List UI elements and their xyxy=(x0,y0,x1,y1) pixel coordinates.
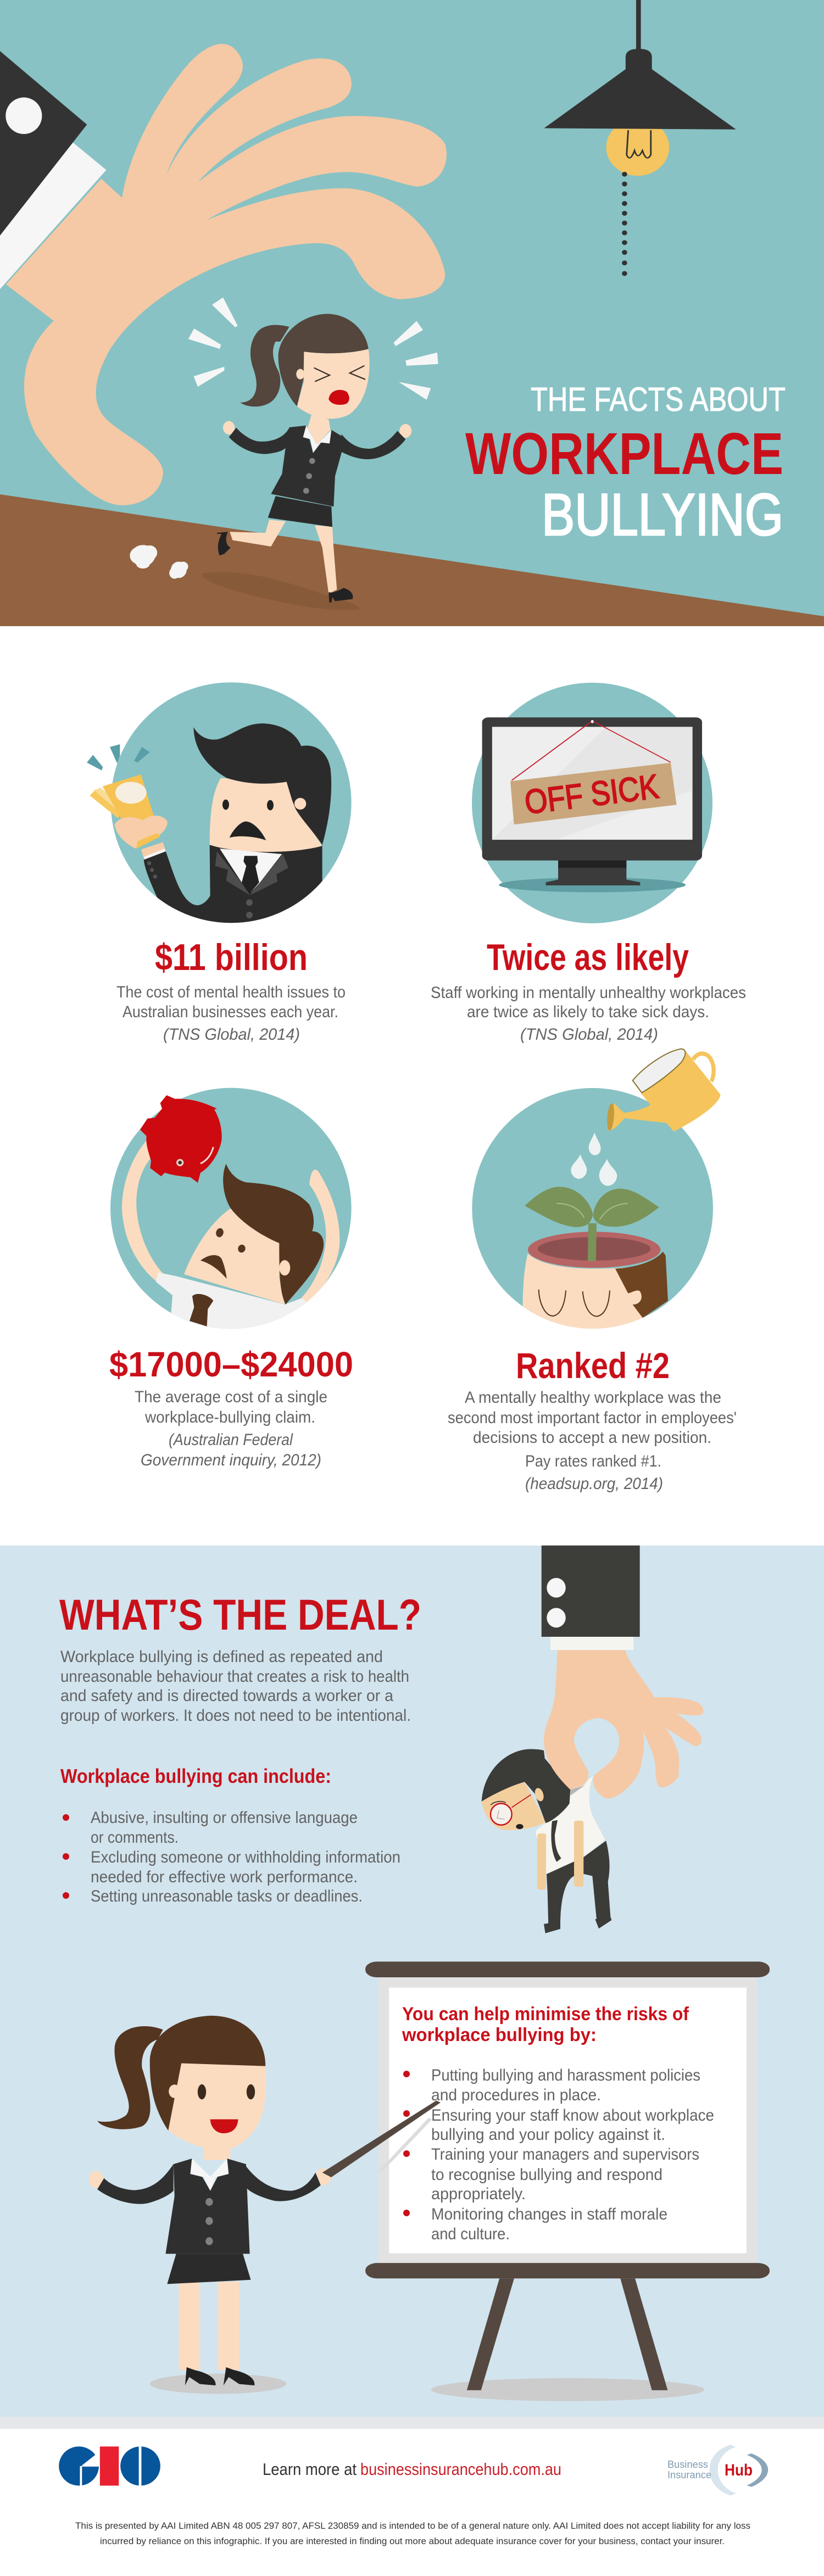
heading: minimise the risks: You can help minimise the risks of xyxy=(402,2004,689,2025)
icon: plant growing from head xyxy=(472,1049,721,1346)
heading: what's the deal: WHAT’S THE DEAL? xyxy=(59,1590,421,1639)
panel: $11 billion xyxy=(87,682,352,1044)
text block: ranked #2 description: (headsup.org, 2014) xyxy=(525,1475,663,1493)
text block: definition: Workplace bullying is defined as repeated and xyxy=(60,1648,383,1666)
text block: twice as likely description: Staff working in mentally unhealthy workplaces xyxy=(431,984,746,1002)
text block: ranked #2 description: A mentally healthy workplace was the xyxy=(465,1389,721,1407)
logo: business insurance hub: Hub xyxy=(725,2461,753,2479)
text block: twice as likely description: are twice as likely to take sick days. xyxy=(467,1003,709,1021)
text block: claim cost description: (Australian Federal xyxy=(169,1431,293,1449)
icon: dust puffs xyxy=(130,545,188,579)
list: minimise risks actions: and culture. xyxy=(431,2225,510,2243)
list: minimise risks actions: to recognise bullying and respond xyxy=(431,2166,662,2184)
icon: alarm marks xyxy=(188,297,438,400)
list: bullying behaviours: Excluding someone or withholding information xyxy=(91,1848,400,1866)
icon: man with money xyxy=(87,682,352,932)
text block: $11 billion description xyxy=(116,983,346,1044)
text block: ranked #2 description: Pay rates ranked #1. xyxy=(525,1452,661,1470)
logo: GIO xyxy=(59,2446,160,2486)
subheading: can include: Workplace bullying can include: xyxy=(60,1765,331,1787)
list: minimise risks actions: Monitoring changes in staff morale xyxy=(431,2205,667,2223)
illustration: easel board xyxy=(322,1961,770,2401)
text block: definition xyxy=(60,1648,411,1725)
heading: minimise the risks: workplace bullying by: xyxy=(402,2025,597,2045)
text block: definition: and safety and is directed towards a worker or a xyxy=(60,1687,393,1705)
heading: $11 billion: $11 billion xyxy=(155,936,308,978)
disclaimer: incurred by reliance on this infographic. If you are interested in finding out more about adequate insurance cover for your business, contact your insurer. xyxy=(100,2536,725,2546)
disclaimer xyxy=(75,2521,750,2546)
list: minimise risks actions: Training your managers and supervisors xyxy=(431,2145,699,2164)
list: minimise risks actions: Ensuring your staff know about workplace xyxy=(431,2106,714,2125)
list: minimise risks actions xyxy=(403,2066,714,2243)
call to action xyxy=(263,2460,561,2479)
logo: business insurance hub xyxy=(667,2446,765,2494)
heading: minimise the risks xyxy=(402,2004,689,2045)
figure: running woman xyxy=(188,297,438,610)
logo: business insurance hub: Insurance xyxy=(667,2469,711,2480)
list: minimise risks actions: appropriately. xyxy=(431,2185,526,2203)
panel: claim cost xyxy=(109,1088,353,1469)
text block: ranked #2 description xyxy=(448,1389,737,1493)
list: bullying behaviours: Abusive, insulting or offensive language xyxy=(91,1809,358,1827)
title: BULLYING xyxy=(542,481,783,548)
call to action: Learn more at xyxy=(263,2460,357,2479)
panel: footer xyxy=(59,2446,765,2546)
panel: ranked #2 xyxy=(448,1049,737,1493)
list: minimise risks actions: and procedures in place. xyxy=(431,2086,601,2104)
logo: business insurance hub: Business xyxy=(667,2459,708,2470)
text block: claim cost description xyxy=(135,1388,327,1469)
icon: monitor with off sick sign: OFF SICK xyxy=(522,768,661,822)
panel: twice as likely xyxy=(431,683,746,1044)
icon: man shaking out piggy bank xyxy=(110,1088,352,1339)
list: minimise risks actions: bullying and your policy against it. xyxy=(431,2126,665,2144)
disclaimer: This is presented by AAI Limited ABN 48 005 297 807, AFSL 230859 and is intended to be of a general nature only. AAI Limited does not accept liability for any loss xyxy=(75,2521,750,2531)
icon: monitor with off sick sign xyxy=(472,683,712,923)
icon: hand dangling man xyxy=(482,1546,704,1933)
text block: ranked #2 description: second most important factor in employees' xyxy=(448,1409,737,1427)
icon: pull-cord lamp xyxy=(544,0,736,276)
icon: pointer stick xyxy=(322,2100,441,2177)
illustration: presenting woman xyxy=(89,2016,331,2394)
title xyxy=(465,381,786,548)
text block: $11 billion description: Australian businesses each year. xyxy=(123,1003,338,1021)
text block: twice as likely description: (TNS Global, 2014) xyxy=(520,1025,658,1044)
list: bullying behaviours: or comments. xyxy=(91,1828,179,1847)
text block: $11 billion description: (TNS Global, 2014) xyxy=(163,1025,300,1044)
list: bullying behaviours: Setting unreasonable tasks or deadlines. xyxy=(91,1887,363,1905)
text block: definition: unreasonable behaviour that creates a risk to health xyxy=(60,1668,409,1686)
text block: definition: group of workers. It does not need to be intentional. xyxy=(60,1707,411,1725)
text block: twice as likely description xyxy=(431,984,746,1044)
list: bullying behaviours: needed for effective work performance. xyxy=(91,1868,358,1886)
icon: giant hand and sleeve xyxy=(0,44,447,505)
panel: hero xyxy=(0,0,824,626)
text block: claim cost description: Government inquiry, 2012) xyxy=(141,1451,321,1469)
icon: watering can xyxy=(606,1049,721,1131)
panel: what's the deal xyxy=(0,1546,824,2429)
call to action: businessinsurancehub.com.au xyxy=(360,2460,561,2479)
ground xyxy=(0,494,824,626)
list: bullying behaviours xyxy=(63,1809,400,1905)
text block: claim cost description: The average cost of a single xyxy=(135,1388,327,1406)
list: minimise risks actions: Putting bullying and harassment policies xyxy=(431,2066,700,2084)
heading: twice as likely: Twice as likely xyxy=(487,936,689,978)
heading: ranked #2: Ranked #2 xyxy=(516,1345,670,1386)
text block: claim cost description: workplace-bullying claim. xyxy=(144,1408,315,1426)
text block: ranked #2 description: decisions to accept a new position. xyxy=(473,1429,711,1447)
text block: $11 billion description: The cost of mental health issues to xyxy=(116,983,346,1001)
heading: $17000–$24000: $17000–$24000 xyxy=(109,1345,353,1384)
